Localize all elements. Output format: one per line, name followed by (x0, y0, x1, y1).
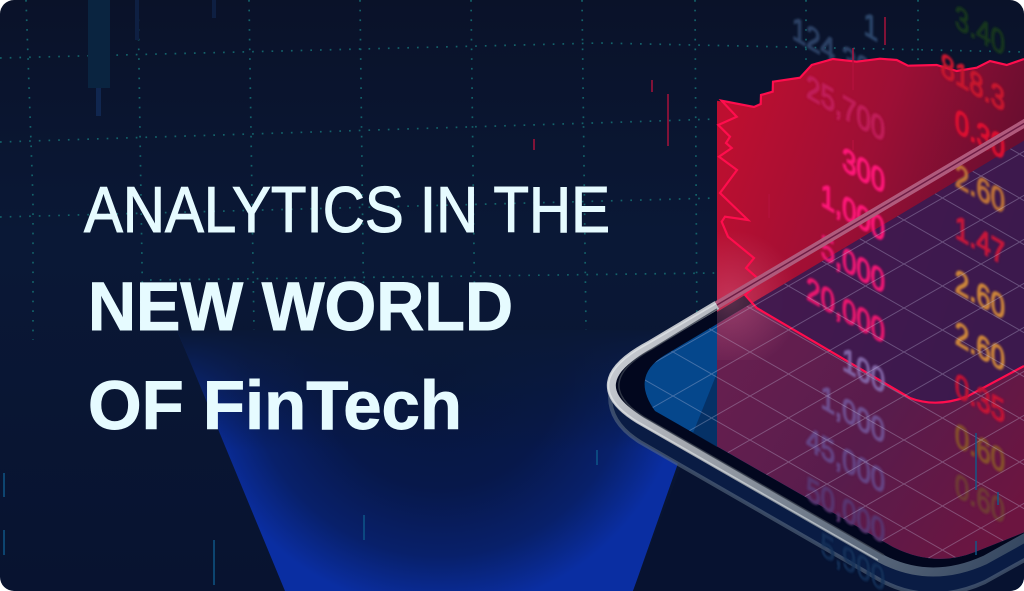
phone metal frame (611, 305, 1024, 572)
price column: 20,000 (806, 269, 885, 351)
frame seen through red panel (717, 120, 1024, 305)
price column (806, 67, 885, 551)
change column: 2.60 (955, 262, 1005, 327)
phone screen purple section (717, 304, 1024, 559)
red area chart (717, 60, 1024, 312)
red chart outline (718, 59, 1024, 403)
change column: 818.3 (941, 45, 1005, 119)
change column: 0.30 (955, 102, 1005, 167)
numbers above the red chart: 1 (864, 4, 878, 49)
phone screen grid (645, 137, 1024, 559)
change column: 0.60 (955, 416, 1005, 481)
change column: 1.47 (955, 208, 1005, 273)
dim candlestick at top left (88, 0, 216, 116)
price column: 25,700 (806, 67, 885, 149)
title line 3: OF FinTech (88, 367, 462, 444)
dotted chart grid (0, 0, 1024, 340)
trading numbers (806, 45, 1005, 551)
phone reflection (610, 388, 1024, 591)
phone screen blue section (644, 304, 1024, 559)
dark area below phone (633, 577, 1024, 591)
price column: 1,000 (821, 377, 885, 451)
price column: 45,000 (806, 419, 885, 501)
numbers above the red chart: 124,300 (792, 9, 885, 99)
title line 1: ANALYTICS IN THE (84, 174, 610, 246)
beam upper fade (177, 330, 666, 440)
price column: 5,000 (821, 227, 885, 301)
purple upper right of screen (745, 130, 1024, 403)
beam shadow on screen (693, 373, 717, 447)
price column: 1,000 (821, 175, 885, 249)
title (84, 174, 610, 444)
pink haze at chart base (717, 245, 783, 358)
frame highlight (609, 303, 878, 560)
frame dark groove (619, 309, 884, 555)
change column: 0.35 (955, 366, 1005, 431)
change column: 0.60 (955, 466, 1005, 531)
title line 2: NEW WORLD (88, 268, 513, 345)
change column (941, 45, 1005, 531)
price column: 100 (842, 340, 885, 401)
price column: 50,000 (806, 469, 885, 551)
blue light beam (177, 330, 725, 591)
phone bezel (616, 296, 1024, 568)
numbers above the red chart (792, 6, 1005, 60)
price column: 300 (842, 140, 885, 201)
change column: 2.60 (955, 156, 1005, 221)
change column: 2.60 (955, 314, 1005, 379)
